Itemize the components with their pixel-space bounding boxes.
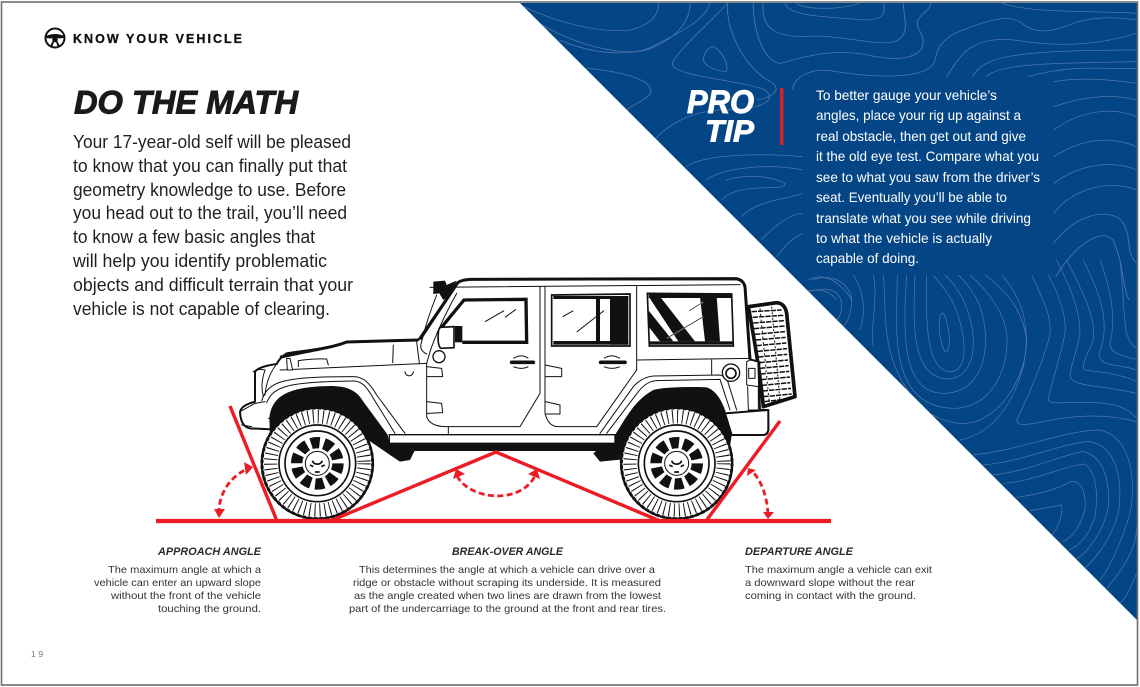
departure angle line <box>706 421 780 521</box>
jeep: rocker shadow <box>390 443 617 450</box>
arrow: break-over angle arc <box>453 469 540 496</box>
text block: pro tip: see to what you saw from the driver’s <box>816 170 1040 185</box>
arrow: approach angle arc <box>214 462 253 518</box>
caption: approach angle: without the front of the vehicle <box>110 591 261 602</box>
caption: break-over angle <box>349 546 666 615</box>
jeep: rear quarter window <box>647 293 733 346</box>
text block: intro paragraph: will help you identify problematic <box>72 251 327 271</box>
break-over angle lines <box>330 452 660 521</box>
jeep: mirror <box>438 327 454 348</box>
caption: break-over angle: as the angle created when two lines are drawn from the lowest <box>354 591 661 602</box>
illustration: jeep side view <box>240 279 795 520</box>
caption: departure angle: a downward slope without the rear <box>745 578 916 589</box>
caption: approach angle: vehicle can enter an upward slope <box>94 578 261 589</box>
diagram: angle lines <box>156 406 831 521</box>
panel: blue pro tip triangle with contour map <box>520 3 1137 620</box>
ground line <box>156 519 831 523</box>
jeep: hood top heavy line <box>280 340 418 357</box>
text block: pro tip: it the old eye test. Compare what you <box>816 149 1039 164</box>
jeep: spare tire <box>748 303 795 407</box>
text block: intro paragraph: vehicle is not capable of clearing. <box>73 299 330 319</box>
heading: pro tip <box>687 84 754 148</box>
jeep: snorkel <box>433 281 457 300</box>
jeep: front window <box>441 299 527 342</box>
divider: red bar <box>780 88 783 145</box>
caption: approach angle: touching the ground. <box>158 604 261 615</box>
jeep: front wheel well <box>269 386 415 462</box>
jeep: rear wheel <box>620 407 733 520</box>
heading: pro tip: TIP <box>705 114 754 148</box>
page number: 19 <box>31 649 46 659</box>
caption: approach angle: APPROACH ANGLE <box>157 546 262 558</box>
jeep: fender and trim lines <box>240 285 760 433</box>
caption: break-over angle: part of the undercarriage to the ground at the front and rear tires. <box>349 604 666 615</box>
section label: know your vehicle: KNOW YOUR VEHICLE <box>73 32 242 46</box>
caption: departure angle: DEPARTURE ANGLE <box>745 546 854 558</box>
text block: pro tip <box>816 88 1040 266</box>
arrow: departure angle arc <box>747 468 774 519</box>
text block: intro paragraph <box>72 132 353 319</box>
jeep: rocker panel <box>389 435 615 443</box>
text block: intro paragraph: geometry knowledge to use. Before <box>73 180 346 200</box>
jeep: rear wheel well <box>593 387 732 462</box>
caption: break-over angle: This determines the angle at which a vehicle can drive over a <box>359 565 655 576</box>
icon: steering wheel <box>46 28 64 48</box>
text block: pro tip: translate what you see while driving <box>816 211 1031 226</box>
text block: pro tip: To better gauge your vehicle’s <box>816 88 997 103</box>
caption: break-over angle: BREAK-OVER ANGLE <box>452 546 564 558</box>
caption: approach angle <box>94 546 262 615</box>
text block: pro tip: seat. Eventually you’ll be able to <box>816 190 1007 205</box>
jeep: front wheel <box>261 407 374 520</box>
text block: pro tip: capable of doing. <box>816 251 919 266</box>
text block: intro paragraph: objects and difficult terrain that your <box>73 275 353 295</box>
jeep: body silhouette <box>240 279 768 450</box>
caption: departure angle <box>745 546 932 602</box>
text block: pro tip: real obstacle, then get out and give <box>816 129 1026 144</box>
text block: pro tip: angles, place your rig up against a <box>816 108 1021 123</box>
text block: intro paragraph: Your 17-year-old self will be pleased <box>73 132 351 152</box>
jeep: rear bumper <box>725 410 768 435</box>
caption: approach angle: The maximum angle at which a <box>108 565 261 576</box>
text block: intro paragraph: to know that you can finally put that <box>73 156 347 176</box>
heading: pro tip: PRO <box>687 84 754 120</box>
text block: pro tip: to what the vehicle is actually <box>816 231 992 246</box>
approach angle line <box>230 406 277 521</box>
caption: departure angle: coming in contact with the ground. <box>745 591 916 602</box>
jeep: door handles <box>512 356 625 368</box>
caption: break-over angle: ridge or obstacle without scraping its underside. It is measured <box>353 578 661 589</box>
jeep: fuel cap <box>722 364 740 381</box>
jeep: roof heavy line <box>420 279 750 359</box>
jeep: rear door window <box>552 294 630 346</box>
title: do the math: DO THE MATH <box>74 84 299 120</box>
text block: intro paragraph: you head out to the trail, you’ll need <box>73 203 347 223</box>
caption: departure angle: The maximum angle a vehicle can exit <box>745 565 932 576</box>
jeep: mirror mount <box>433 351 445 363</box>
text block: intro paragraph: to know a few basic angles that <box>73 227 315 247</box>
